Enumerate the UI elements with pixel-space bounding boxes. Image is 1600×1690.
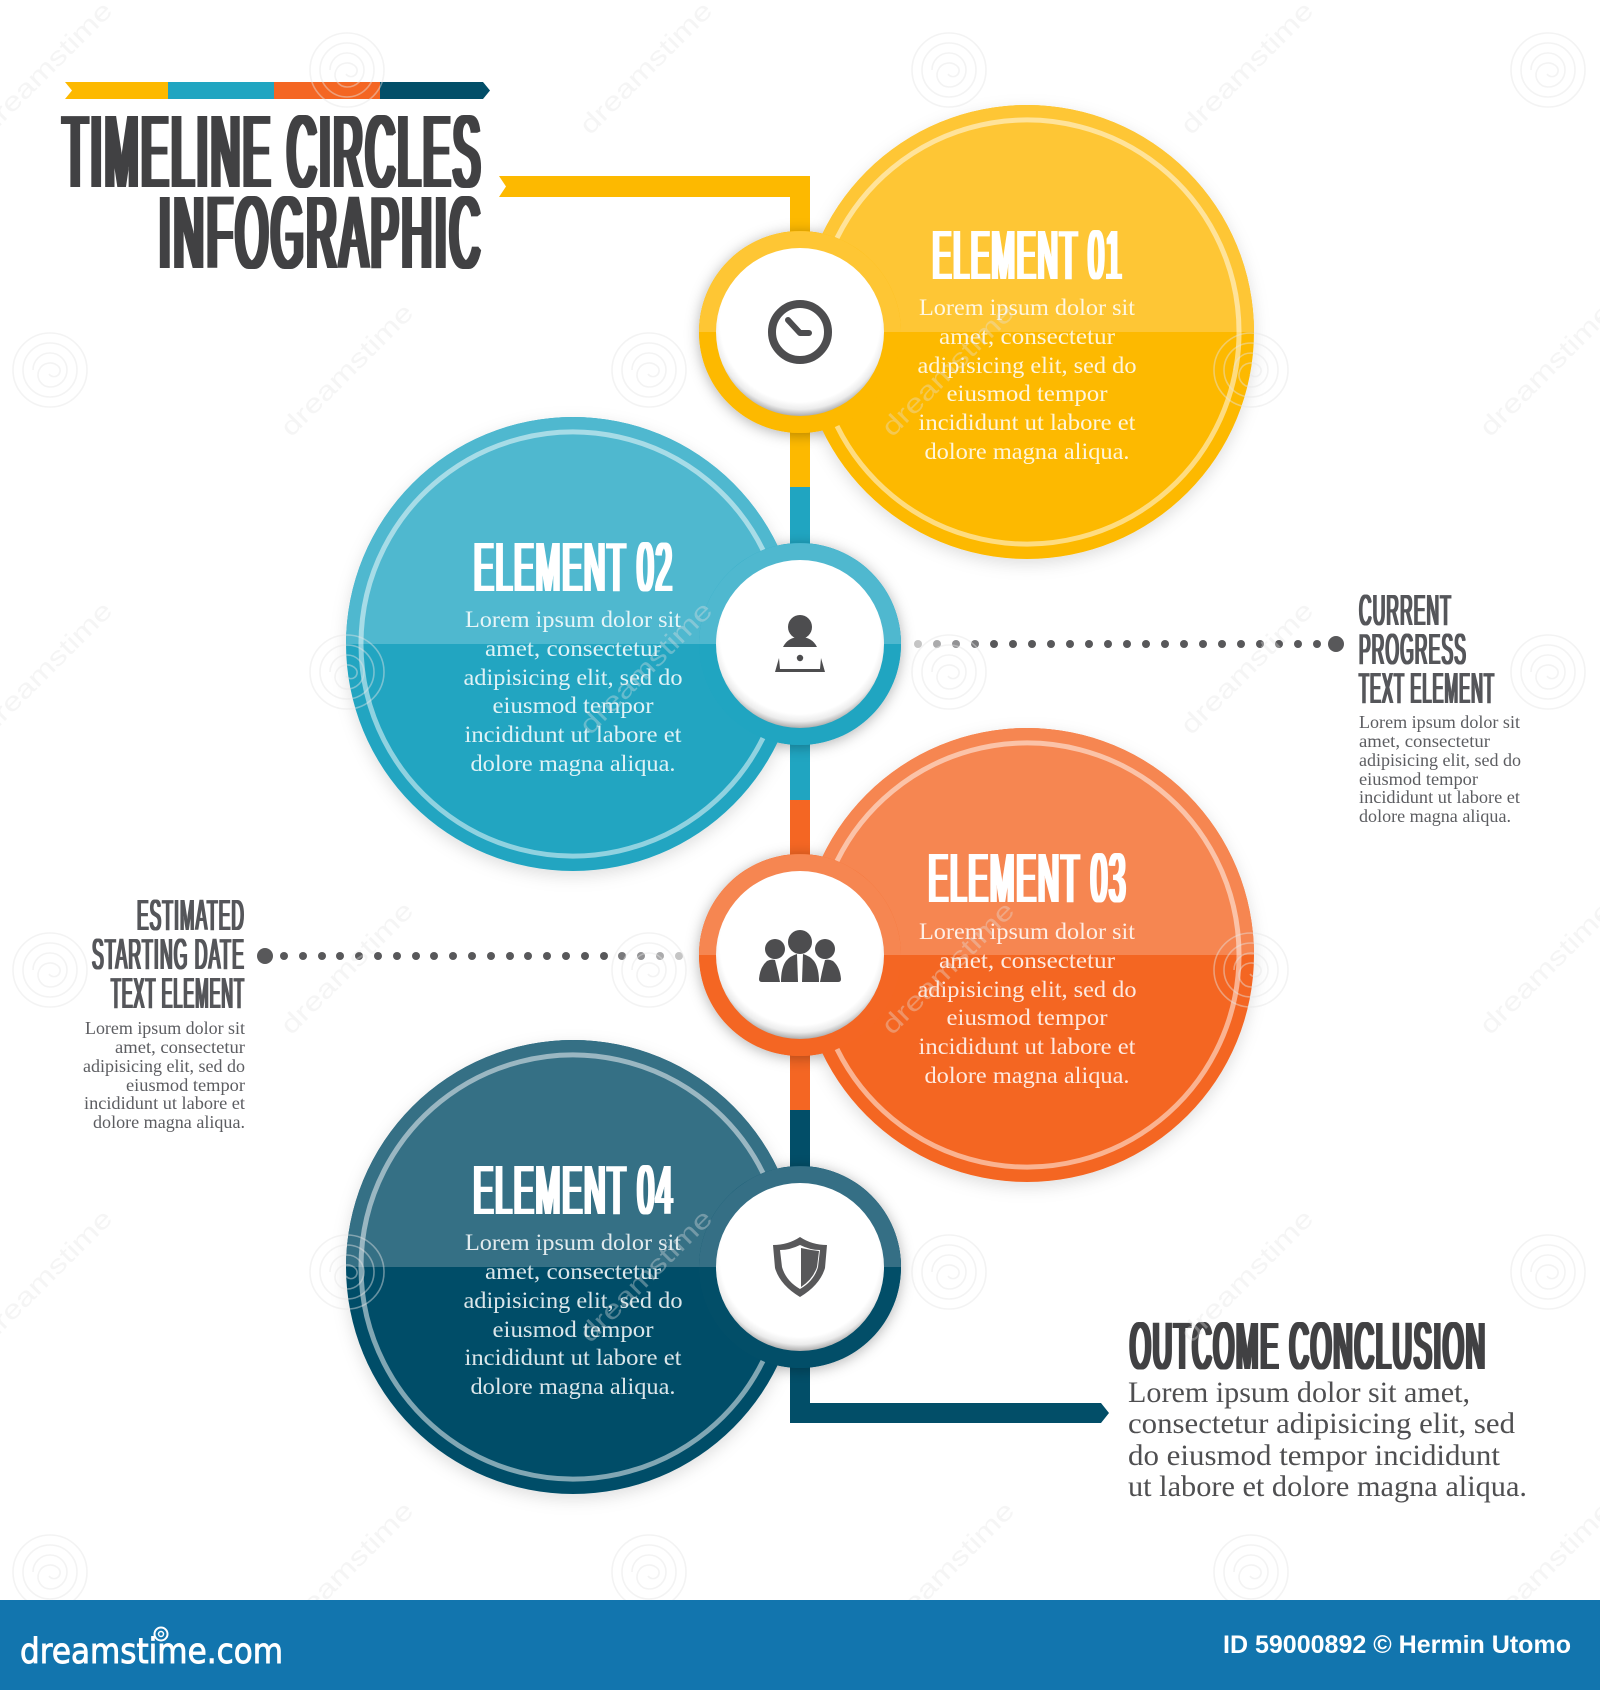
text block: current progress: adipisicing elit, sed do [1359,750,1521,770]
ring 03 [699,854,901,1056]
body text 02: incididunt ut labore et [464,722,682,747]
icon: shield [773,1237,827,1297]
text: TIMELINE CIRCLES [63,94,483,209]
text block: current progress: incididunt ut labore et [1359,787,1520,807]
icon: clock [772,304,828,360]
text block: estimated starting date: Lorem ipsum dolor sit [85,1018,245,1038]
watermark text: dreamstime [1174,595,1319,740]
body text 02: amet, consectetur [485,636,661,661]
body text 01: dolore magna aliqua. [924,439,1130,464]
watermark text: dreamstime [1473,1495,1600,1640]
title [63,94,483,290]
panel: element 01: ELEMENT 01 [932,216,1124,294]
ring 04 [699,1166,901,1368]
dotted connector: current progress [914,636,1344,652]
text block: current progress [1359,586,1521,826]
watermark text: dreamstime [274,1495,419,1640]
body text 03: eiusmod tempor [946,1005,1108,1030]
ring shadow 04 [699,1166,901,1368]
text: TEXT ELEMENT [111,969,245,1018]
icon: person at laptop [775,615,825,672]
body text 04 [464,1230,682,1399]
footer credit: ID 59000892 © Hermin Utomo [1223,1631,1571,1659]
top colour bar [65,82,490,99]
body text 03: amet, consectetur [939,948,1115,973]
text block: estimated starting date [83,891,245,1132]
body text 03: adipisicing elit, sed do [918,977,1136,1002]
body text 02: Lorem ipsum dolor sit [465,607,682,632]
ring shadow 02 [699,543,901,745]
big circle 04 [346,1040,800,1494]
body text 02: dolore magna aliqua. [470,751,676,776]
timeline spine [499,176,1109,1423]
text block: current progress: dolore magna aliqua. [1359,806,1511,826]
body text 04: dolore magna aliqua. [470,1374,676,1399]
watermark text: dreamstime [274,297,419,442]
ring 02 [699,543,901,745]
body text 01: adipisicing elit, sed do [918,353,1136,378]
icon: team [759,930,841,982]
panel: element 03: ELEMENT 03 [928,839,1128,917]
watermark text: dreamstime [1473,297,1600,442]
text block: outcome conclusion: ut labore et dolore magna aliqua. [1128,1470,1527,1503]
text block: estimated starting date: incididunt ut labore et [84,1093,245,1113]
watermark text: dreamstime [1174,1203,1319,1348]
text block: estimated starting date: adipisicing elit, sed do [83,1056,245,1076]
body text 01 [918,295,1136,464]
ring shadow 01 [699,231,901,433]
body text 03: dolore magna aliqua. [924,1063,1130,1088]
panel: element 03 [699,728,1254,1182]
body text 01: incididunt ut labore et [918,410,1136,435]
text block: estimated starting date: eiusmod tempor [126,1075,245,1095]
big circle 03 [800,728,1254,1182]
watermark text: dreamstime [1174,0,1319,140]
panel: element 02 [346,417,901,871]
footer logo: dreamstime.com [20,1632,283,1672]
body text 03 [918,919,1136,1088]
text block: estimated starting date: amet, consectetur [115,1037,245,1057]
body text 04: adipisicing elit, sed do [464,1288,682,1313]
watermark text: dreamstime [573,1203,718,1348]
watermark text: dreamstime [875,1495,1020,1640]
panel: element 04: ELEMENT 04 [474,1151,674,1229]
watermark text: dreamstime [1473,895,1600,1040]
panel: element 02: ELEMENT 02 [474,528,674,606]
body text 04: Lorem ipsum dolor sit [465,1230,682,1255]
dotted connector: estimated starting date [257,948,683,964]
body text 02 [464,607,682,776]
white disc 03 [716,871,884,1039]
panel: element 04 [346,1040,901,1494]
body text 03: Lorem ipsum dolor sit [919,919,1136,944]
watermark text: dreamstime [875,297,1020,442]
text: ESTIMATED [137,891,245,940]
body text 04: amet, consectetur [485,1259,661,1284]
body text 02: eiusmod tempor [492,693,654,718]
big circle 02 [346,417,800,871]
text block: outcome conclusion: Lorem ipsum dolor sit amet, [1128,1376,1470,1409]
body text 04: incididunt ut labore et [464,1345,682,1370]
body text 01: eiusmod tempor [946,381,1108,406]
text block: outcome conclusion: do eiusmod tempor incididunt [1128,1439,1501,1472]
ring shadow 03 [699,854,901,1056]
watermark text: dreamstime [274,895,419,1040]
text: STARTING DATE [92,930,245,979]
text block: current progress: CURRENT [1359,586,1452,635]
text block: current progress: Lorem ipsum dolor sit [1359,712,1520,732]
panel: element 01 [699,105,1254,559]
footer bar [0,1600,1600,1690]
body text 03: incididunt ut labore et [918,1034,1136,1059]
white disc 01 [716,248,884,416]
body text 01: amet, consectetur [939,324,1115,349]
big circle 01 [800,105,1254,559]
body text 04: eiusmod tempor [492,1317,654,1342]
body text 02: adipisicing elit, sed do [464,665,682,690]
white disc 02 [716,560,884,728]
text block: outcome conclusion [1128,1309,1527,1503]
ring 01 [699,231,901,433]
text block: current progress: amet, consectetur [1359,731,1490,751]
watermark text: dreamstime [573,0,718,140]
white disc 04 [716,1183,884,1351]
text block: estimated starting date: dolore magna aliqua. [93,1112,245,1132]
text: INFOGRAPHIC [159,175,483,290]
watermark text: dreamstime [573,595,718,740]
text block: current progress: eiusmod tempor [1359,769,1478,789]
body text 01: Lorem ipsum dolor sit [919,295,1136,320]
text block: outcome conclusion: consectetur adipisicing elit, sed [1128,1407,1515,1440]
watermark text: dreamstime [875,895,1020,1040]
